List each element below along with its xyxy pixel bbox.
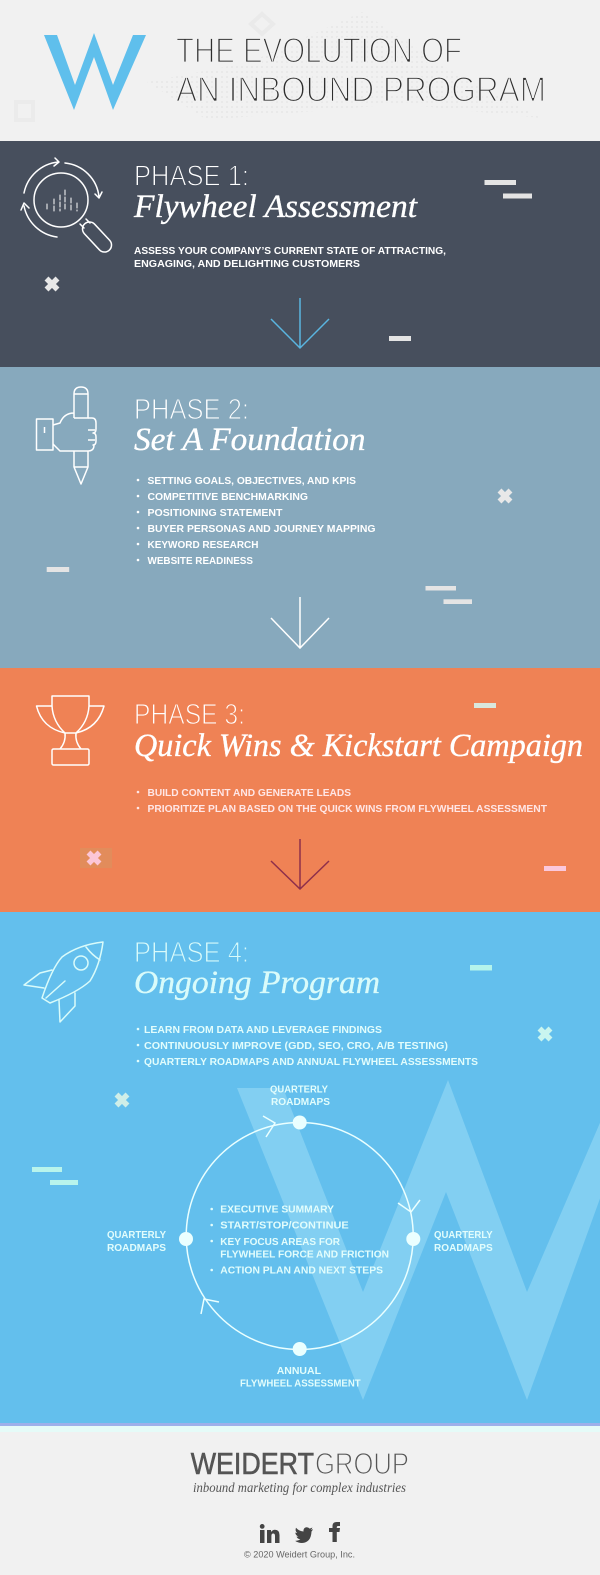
phase 3 list: PRIORITIZE PLAN BASED ON THE QUICK WINS FROM FLYWHEEL ASSESSMENT bbox=[148, 803, 548, 815]
phase 3 label: PHASE 3: bbox=[134, 699, 245, 731]
cycle labels: ANNUAL bbox=[277, 1365, 322, 1377]
cycle labels: ROADMAPS bbox=[271, 1096, 330, 1108]
cycle centre list bbox=[210, 1204, 389, 1277]
icon: twitter bbox=[295, 1527, 313, 1543]
phase 1 label: PHASE 1: bbox=[134, 160, 249, 192]
icon: facebook bbox=[329, 1522, 340, 1542]
panel: phase 1 bbox=[0, 141, 600, 367]
phase 2 list: POSITIONING STATEMENT bbox=[148, 507, 283, 519]
phase 4 list: QUARTERLY ROADMAPS AND ANNUAL FLYWHEEL ASSESSMENTS bbox=[144, 1056, 478, 1068]
arrow bbox=[271, 597, 329, 648]
phase 2 heading: Set A Foundation bbox=[134, 422, 366, 458]
logo: Weidert Group: WEIDERT bbox=[191, 1446, 314, 1481]
cycle labels bbox=[107, 1084, 493, 1390]
cycle labels: QUARTERLY bbox=[270, 1084, 328, 1096]
cycle centre list: ACTION PLAN AND NEXT STEPS bbox=[220, 1265, 383, 1277]
cycle centre list: KEY FOCUS AREAS FOR bbox=[220, 1236, 340, 1248]
icon: W logo bbox=[44, 33, 146, 110]
title: AN INBOUND PROGRAM bbox=[176, 70, 546, 110]
phase 2 list: WEBSITE READINESS bbox=[148, 555, 253, 567]
flywheel cycle diagram bbox=[107, 1084, 493, 1390]
icon: trophy bbox=[36, 696, 104, 765]
phase 4 heading: Ongoing Program bbox=[134, 965, 380, 1001]
cycle labels: QUARTERLY bbox=[434, 1229, 493, 1241]
panel: phase 4 bbox=[0, 912, 600, 1423]
panel: phase 3 bbox=[0, 668, 600, 912]
icon: linkedin bbox=[260, 1524, 280, 1543]
cycle labels: ROADMAPS bbox=[107, 1242, 166, 1254]
phase 1 description: ENGAGING, AND DELIGHTING CUSTOMERS bbox=[134, 258, 360, 270]
phase 2 list: KEYWORD RESEARCH bbox=[148, 539, 258, 551]
icon: hand holding pencil bbox=[36, 387, 96, 484]
cycle labels: FLYWHEEL ASSESSMENT bbox=[240, 1378, 361, 1390]
cycle labels: ROADMAPS bbox=[434, 1242, 493, 1254]
panel: footer bbox=[0, 1423, 600, 1575]
phase 1 description bbox=[134, 245, 446, 270]
panel: header bbox=[0, 0, 600, 141]
logo: Weidert Group: GROUP bbox=[315, 1446, 409, 1481]
phase 4 label: PHASE 4: bbox=[134, 937, 249, 969]
title bbox=[176, 32, 546, 110]
logo: Weidert Group bbox=[191, 1446, 409, 1481]
panel: phase 2 bbox=[0, 367, 600, 668]
title: THE EVOLUTION OF bbox=[176, 32, 462, 70]
icon: rocket bbox=[24, 942, 103, 1022]
tagline: inbound marketing for complex industries bbox=[193, 1481, 406, 1496]
phase 1 heading: Flywheel Assessment bbox=[133, 189, 418, 225]
cycle centre list: START/STOP/CONTINUE bbox=[220, 1220, 349, 1232]
copyright: © 2020 Weidert Group, Inc. bbox=[244, 1550, 355, 1561]
phase 2 list: SETTING GOALS, OBJECTIVES, AND KPIS bbox=[148, 475, 356, 487]
cycle centre list: FLYWHEEL FORCE AND FRICTION bbox=[220, 1249, 389, 1261]
cycle centre list: EXECUTIVE SUMMARY bbox=[220, 1204, 334, 1216]
phase 1 description: ASSESS YOUR COMPANY’S CURRENT STATE OF ATTRACTING, bbox=[134, 245, 446, 257]
cycle labels: QUARTERLY bbox=[107, 1229, 166, 1241]
phase 4 list: CONTINUOUSLY IMPROVE (GDD, SEO, CRO, A/B TESTING) bbox=[144, 1040, 448, 1052]
phase 2 list bbox=[137, 475, 376, 567]
arrow bbox=[271, 839, 329, 889]
phase 2 list: BUYER PERSONAS AND JOURNEY MAPPING bbox=[148, 523, 376, 535]
phase 3 list bbox=[137, 787, 548, 815]
phase 4 list: LEARN FROM DATA AND LEVERAGE FINDINGS bbox=[144, 1024, 382, 1036]
phase 2 list: COMPETITIVE BENCHMARKING bbox=[148, 491, 308, 503]
phase 4 list bbox=[137, 1024, 478, 1068]
phase 2 label: PHASE 2: bbox=[134, 394, 249, 426]
phase 3 heading: Quick Wins & Kickstart Campaign bbox=[134, 728, 583, 764]
arrow bbox=[271, 298, 329, 348]
icons: social media bbox=[260, 1522, 340, 1543]
watermark W bbox=[237, 1080, 600, 1400]
phase 3 list: BUILD CONTENT AND GENERATE LEADS bbox=[148, 787, 351, 799]
icon: magnifier with flywheel bbox=[21, 158, 114, 255]
